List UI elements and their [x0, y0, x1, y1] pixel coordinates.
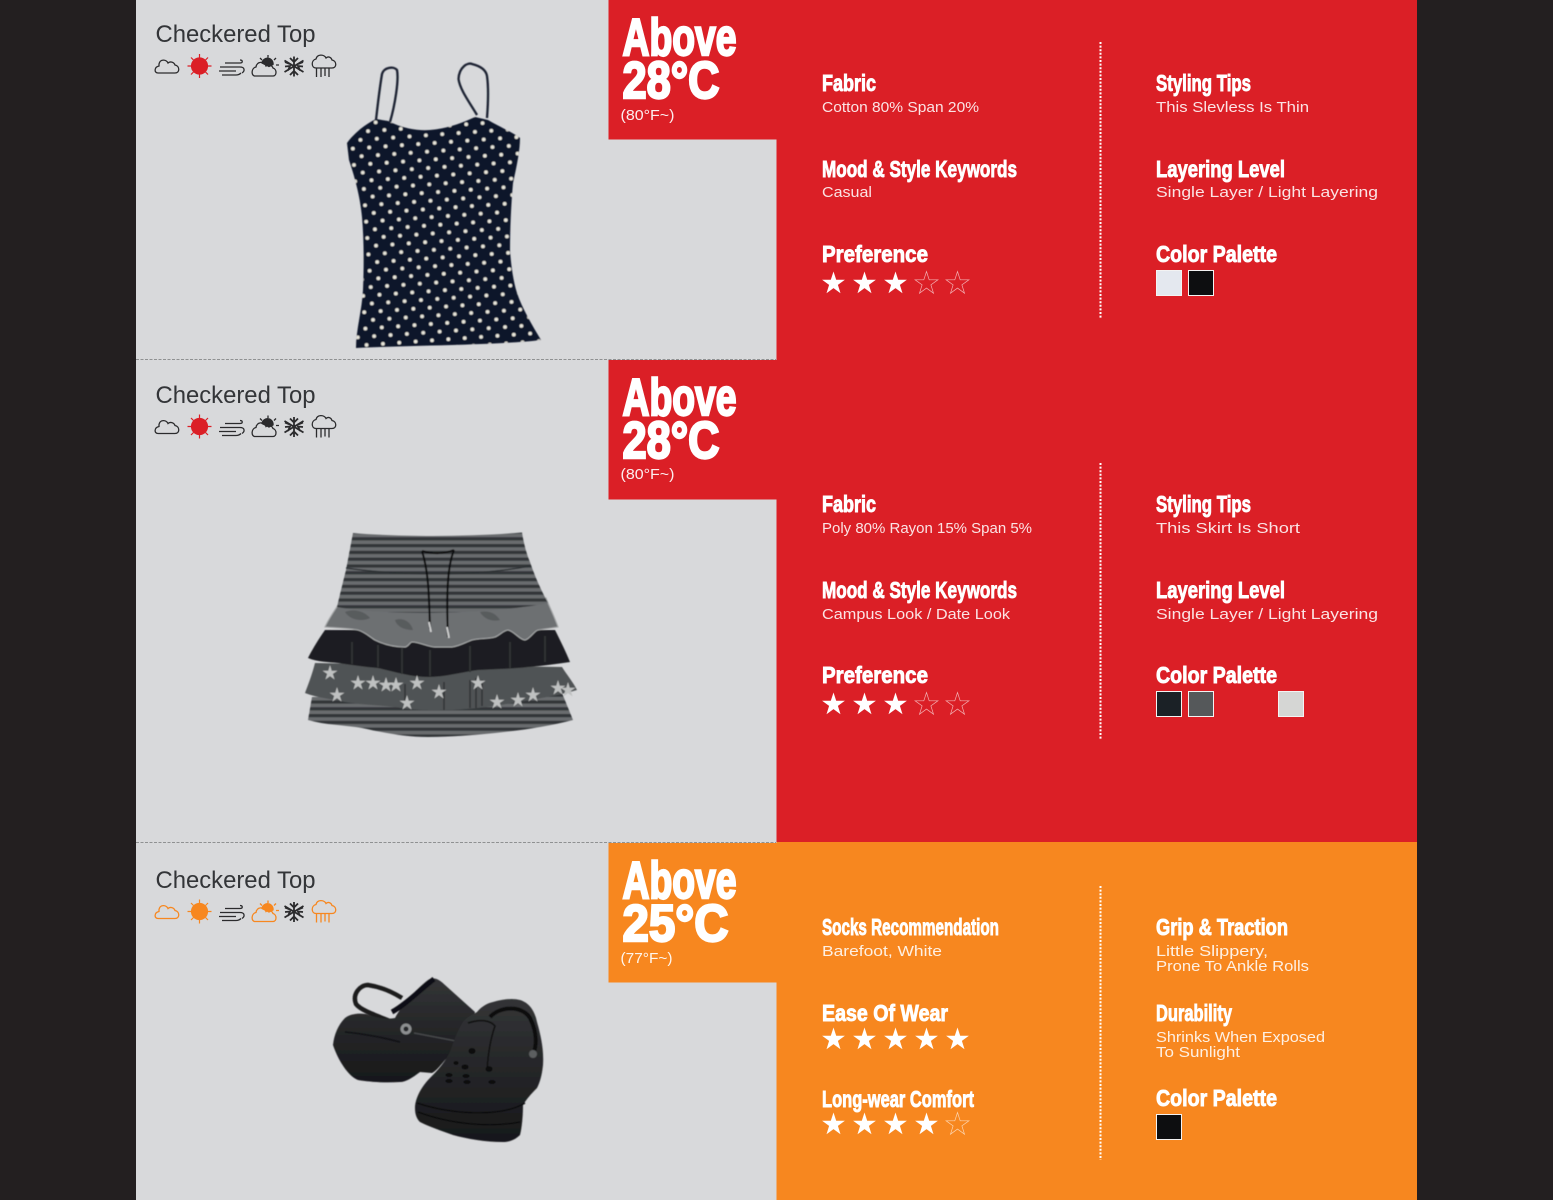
layering level: [1156, 577, 1378, 623]
preference rating: Preference: [822, 241, 928, 267]
fabric: Poly 80% Rayon 15% Span 5%: [822, 520, 1032, 537]
weather icons: [155, 54, 336, 78]
orange panel: [776, 842, 1417, 1200]
styling tips: [1156, 491, 1301, 537]
durability: [1156, 1000, 1325, 1061]
temperature tab: above 25C: [608, 843, 777, 982]
item 1: tank top section: [155, 21, 541, 348]
layering level: Single Layer / Light Layering: [1156, 606, 1378, 623]
fabric: [822, 491, 1032, 537]
photo: black platform clogs: [333, 978, 543, 1142]
styling tips: Styling Tips: [1156, 70, 1251, 96]
durability: To Sunlight: [1156, 1044, 1241, 1061]
photo: layered mini skirt: [305, 532, 577, 737]
durability: Durability: [1156, 1000, 1232, 1026]
layering level: Layering Level: [1156, 156, 1285, 182]
grip and traction: Prone To Ankle Rolls: [1156, 958, 1309, 975]
item title: Checkered Top: [156, 867, 316, 894]
fabric: Cotton 80% Span 20%: [822, 99, 979, 116]
item title: Checkered Top: [156, 21, 316, 48]
styling tips: [1156, 70, 1309, 116]
details panel row 2: [822, 463, 1378, 739]
mood and style keywords: Campus Look / Date Look: [822, 606, 1011, 623]
details panel row 1: [822, 42, 1378, 318]
styling tips: Styling Tips: [1156, 491, 1251, 517]
left grey panel: [136, 0, 777, 1200]
column divider: [1100, 886, 1102, 1160]
weather icons: [155, 414, 336, 438]
temperature tab: above 28C (row 2): (80°F~): [620, 466, 674, 483]
item 3: clogs section: [155, 867, 543, 1142]
item 2: skirt section: [155, 382, 577, 737]
temperature tab: above 28C (row 1): [608, 0, 777, 140]
photo: polka dot tank top: [347, 64, 541, 348]
temperature tab: above 28C (row 2): [608, 360, 777, 500]
column divider: [1100, 463, 1102, 739]
mood and style keywords: Casual: [822, 184, 872, 201]
mood and style keywords: [822, 577, 1017, 623]
layering level: [1156, 156, 1378, 201]
styling tips: This Slevless Is Thin: [1156, 99, 1309, 116]
weather icons: [155, 900, 336, 924]
mood and style keywords: Mood & Style Keywords: [822, 577, 1017, 603]
temperature tab: above 28C (row 2): 28°C: [622, 412, 720, 470]
details panel row 3: [822, 886, 1325, 1160]
item title: Checkered Top: [156, 382, 316, 409]
durability: Shrinks When Exposed: [1156, 1029, 1325, 1046]
styling tips: This Skirt Is Short: [1156, 520, 1301, 537]
temperature tab: above 28C (row 1): (80°F~): [620, 107, 674, 124]
fabric: [822, 70, 979, 116]
mood and style keywords: [822, 156, 1017, 201]
column divider: [1100, 42, 1102, 318]
long-wear comfort rating: Long-wear Comfort: [822, 1086, 974, 1112]
fabric: Fabric: [822, 491, 876, 517]
temperature tab: above 28C (row 1): Above: [622, 9, 736, 67]
mood and style keywords: Mood & Style Keywords: [822, 156, 1017, 182]
long-wear comfort rating: [822, 1086, 974, 1134]
layering level: Single Layer / Light Layering: [1156, 184, 1378, 201]
fabric: Fabric: [822, 70, 876, 96]
preference rating: [822, 241, 969, 293]
grip and traction: Little Slippery,: [1156, 943, 1268, 960]
grip and traction: [1156, 914, 1309, 975]
temperature tab: above 25C: 25°C: [622, 895, 728, 953]
ease of wear rating: [822, 1000, 969, 1049]
preference rating: [822, 662, 969, 714]
color palette: Color Palette: [1156, 1085, 1277, 1111]
temperature tab: above 25C: Above: [622, 852, 736, 910]
red panel: [776, 0, 1417, 842]
socks recommendation: [822, 914, 999, 960]
color palette: Color Palette: [1156, 662, 1277, 688]
ease of wear rating: Ease Of Wear: [822, 1000, 948, 1026]
color palette: Color Palette: [1156, 241, 1277, 267]
layering level: Layering Level: [1156, 577, 1285, 603]
grip and traction: Grip & Traction: [1156, 914, 1288, 940]
socks recommendation: Socks Recommendation: [822, 914, 999, 940]
color palette: [1156, 662, 1304, 716]
temperature tab: above 28C (row 2): Above: [622, 369, 736, 427]
color palette: [1156, 1085, 1277, 1140]
socks recommendation: Barefoot, White: [822, 943, 942, 960]
temperature tab: above 25C: (77°F~): [620, 950, 672, 967]
preference rating: Preference: [822, 662, 928, 688]
color palette: [1156, 241, 1277, 296]
temperature tab: above 28C (row 1): 28°C: [622, 52, 720, 110]
